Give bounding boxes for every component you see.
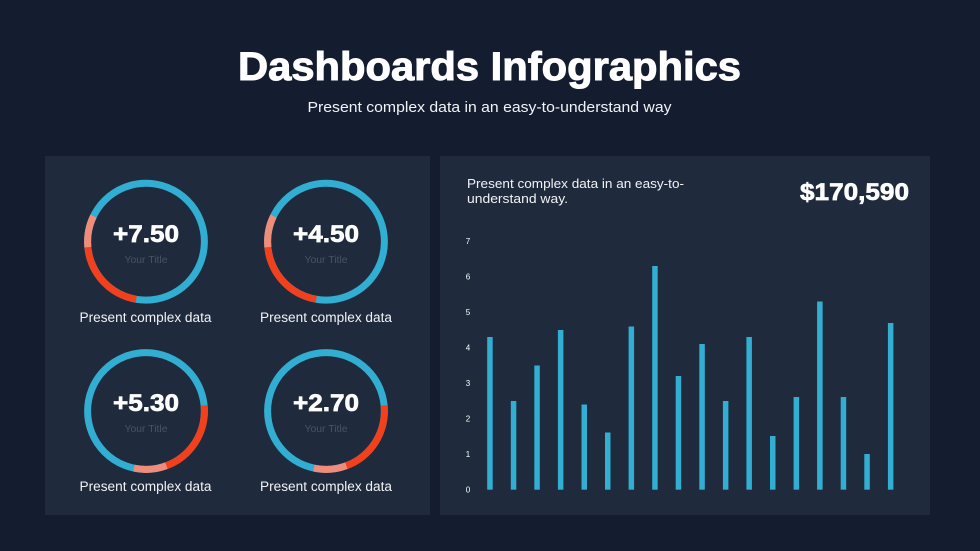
gauge: +7.50 (78, 174, 214, 325)
y axis labels (466, 237, 471, 494)
panel: donut gauges (45, 156, 430, 515)
y axis labels: 5 (466, 308, 471, 317)
gauge: +4.50: Your Title (304, 254, 348, 266)
gauge: +2.70: Your Title (304, 423, 348, 435)
gauge: +2.70: +2.70 (293, 390, 359, 417)
gauge: +4.50: +4.50 (293, 221, 359, 248)
gauge: +5.30: +5.30 (113, 390, 179, 417)
gauge: +5.30: Your Title (124, 423, 168, 435)
y axis labels: 7 (466, 237, 471, 246)
chart description: Present complex data in an easy-to- (467, 176, 684, 191)
y axis labels: 3 (466, 379, 471, 388)
chart description: understand way. (467, 191, 568, 206)
title: Dashboards Infographics (238, 45, 741, 89)
gauge: +5.30: Present complex data (80, 479, 212, 494)
gauge: +4.50: Present complex data (260, 310, 392, 325)
gauge: +2.70: Present complex data (260, 479, 392, 494)
y axis labels: 6 (466, 272, 471, 282)
y axis labels: 1 (466, 450, 471, 459)
panel: bar chart (440, 156, 930, 515)
chart description (467, 176, 684, 206)
gauge: +7.50: +7.50 (113, 221, 179, 248)
gauge: +2.70 (251, 336, 401, 494)
subtitle: Present complex data in an easy-to-understand way (308, 99, 672, 116)
total value: $170,590 (800, 179, 909, 206)
gauge: +5.30 (71, 336, 221, 494)
y axis labels: 4 (466, 344, 471, 352)
gauge: +7.50: Your Title (124, 254, 168, 266)
gauge: +7.50: Present complex data (80, 310, 212, 325)
y axis labels: 2 (466, 414, 471, 424)
bars (487, 266, 893, 490)
gauge: +4.50 (258, 174, 394, 325)
y axis labels: 0 (466, 486, 471, 494)
